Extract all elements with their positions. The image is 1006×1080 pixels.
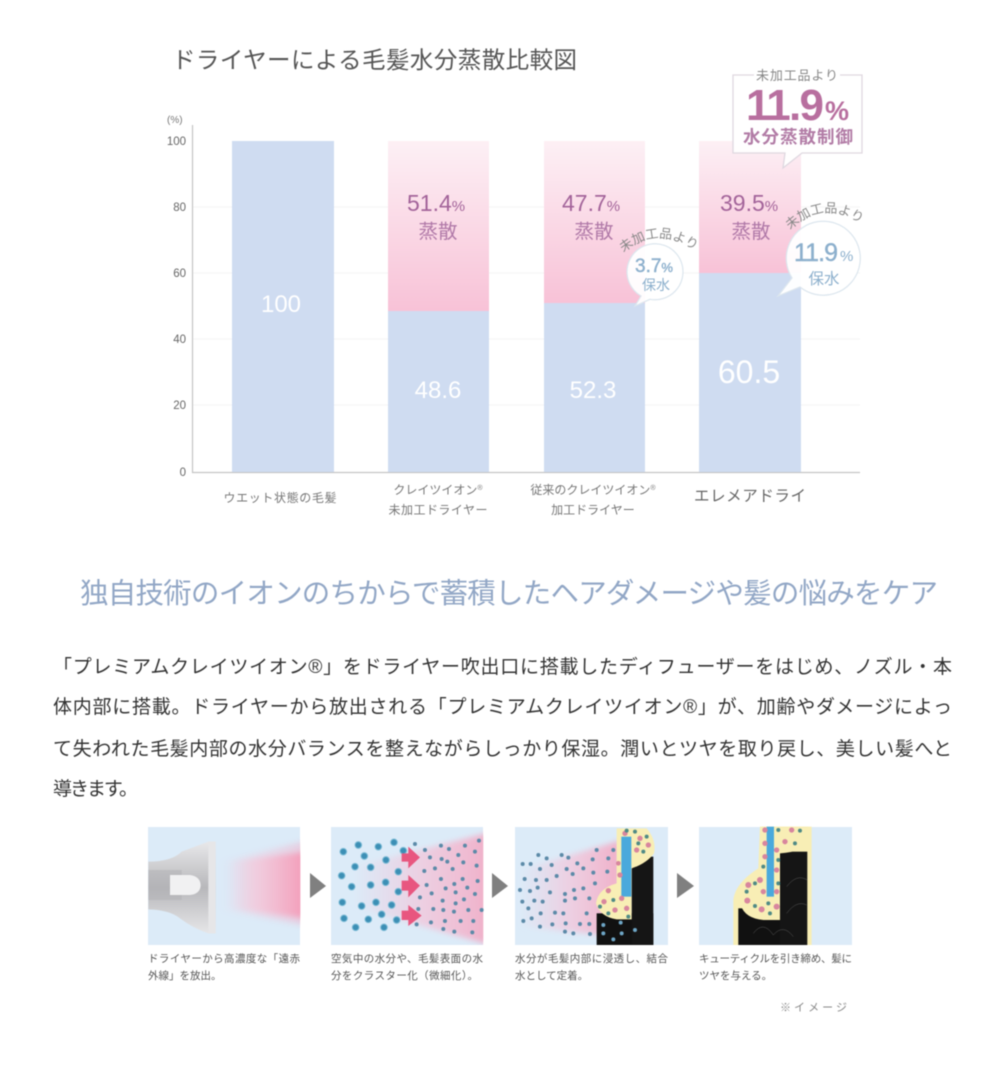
arrow 1	[310, 873, 326, 898]
illustration 1: dryer emits far infrared	[148, 827, 307, 982]
x axis labels: 加工ドライヤー	[551, 503, 635, 517]
y axis labels: 80	[173, 202, 186, 214]
x axis labels: 未加工ドライヤー	[388, 503, 488, 517]
caption 3: 水として定着。	[515, 969, 588, 982]
image note: ※イメージ	[780, 1002, 847, 1014]
caption 3	[515, 952, 668, 982]
caption 4	[699, 952, 852, 982]
callout: 3.7% moisture retention: 保水	[642, 277, 670, 293]
illustration 3: moisture penetrates hair	[515, 827, 668, 982]
arrow 3	[677, 873, 694, 898]
bar: Elema dry: 60.5	[718, 354, 780, 390]
arrow 2	[492, 873, 508, 898]
callout: 11.9% evaporation control: 11.9	[746, 81, 824, 130]
callout: 3.7% moisture retention: 未加工品より	[619, 227, 697, 252]
callout: 3.7% moisture retention: 3.7%	[635, 256, 673, 277]
caption 1: 外線」を放出。	[148, 969, 222, 982]
x axis labels: エレメアドライ	[694, 488, 806, 505]
bar: wet hair: 100	[261, 291, 301, 318]
y axis labels: 100	[167, 136, 186, 148]
caption 3: 水分が毛髪内部に浸透し、結合	[515, 952, 668, 965]
callout: 11.9% evaporation control: 未加工品より	[756, 68, 838, 83]
bar: Elema dry	[699, 141, 801, 472]
bar: conventional dryer: 蒸散	[574, 221, 614, 243]
axes	[192, 125, 860, 472]
bar: conventional dryer	[544, 141, 645, 472]
illustration 2: clustering of moisture	[331, 827, 490, 982]
callout: 3.7% moisture retention	[619, 227, 697, 306]
y axis unit: (%)	[167, 115, 183, 126]
x axis labels: クレイツイオン	[393, 483, 477, 497]
caption 2	[331, 952, 484, 982]
x axis labels: ®	[650, 484, 656, 492]
caption 4: キューティクルを引き締め、髪に	[699, 952, 852, 965]
x axis labels: ウエット状態の毛髪	[224, 491, 336, 505]
section heading: 独自技術のイオンのちからで蓄積したヘアダメージや髪の悩みをケア	[80, 578, 938, 610]
y axis labels: 40	[173, 334, 186, 346]
body paragraph: 体内部に搭載。ドライヤーから放出される「プレミアムクレイツイオン®」が、加齢やダメージによっ	[53, 696, 952, 718]
callout: 11.9% moisture retention: %	[840, 248, 853, 265]
bar chart	[167, 115, 860, 517]
x axis labels: 従来のクレイツイオン	[530, 483, 650, 497]
callout: 11.9% evaporation control: 水分蒸散制御	[743, 127, 853, 147]
y axis labels	[167, 136, 186, 479]
y axis labels: 20	[173, 400, 186, 412]
bar: untreated dryer: 48.6	[415, 377, 461, 404]
callout: 11.9% evaporation control: %	[825, 96, 849, 126]
callout: 11.9% moisture retention: 11.9	[794, 239, 838, 267]
bar: wet hair	[232, 141, 334, 472]
body paragraph: て失われた毛髪内部の水分バランスを整えながらしっかり保湿。潤いとツヤを取り戻し、美しい髪へと	[53, 738, 952, 760]
callout: 11.9% moisture retention: 未加工品より	[786, 202, 862, 230]
x axis labels: ®	[477, 484, 483, 492]
x axis labels	[224, 483, 806, 517]
caption 2: 分をクラスター化（微細化）。	[331, 969, 478, 982]
bar: conventional dryer: 47.7%	[562, 190, 620, 216]
bar: Elema dry: 蒸散	[731, 221, 771, 243]
body paragraph	[53, 656, 952, 800]
illustration 4: cuticle tightened, hair shine	[699, 827, 852, 982]
caption 1: ドライヤーから高濃度な「遠赤	[148, 952, 300, 965]
body paragraph: 導きます。	[53, 778, 138, 800]
bar: Elema dry: 39.5%	[720, 190, 778, 216]
title: ドライヤーによる毛髪水分蒸散比較図	[172, 47, 577, 73]
caption 2: 空気中の水分や、毛髪表面の水	[331, 952, 484, 965]
caption 1	[148, 952, 300, 982]
y axis labels: 0	[180, 467, 186, 479]
callout: 11.9% evaporation control	[733, 68, 862, 168]
caption 4: ツヤを与える。	[699, 969, 772, 982]
callout: 11.9% moisture retention: 保水	[808, 270, 840, 288]
callout: 11.9% moisture retention	[778, 202, 862, 296]
y axis labels: 60	[173, 268, 186, 280]
bar: conventional dryer: 52.3	[570, 377, 616, 404]
bar: untreated dryer: 51.4%	[407, 190, 465, 216]
bar: untreated dryer	[388, 141, 489, 472]
body paragraph: 「プレミアムクレイツイオン®」をドライヤー吹出口に搭載したディフューザーをはじめ、ノズル・本	[53, 656, 952, 678]
bar: untreated dryer: 蒸散	[418, 221, 458, 243]
